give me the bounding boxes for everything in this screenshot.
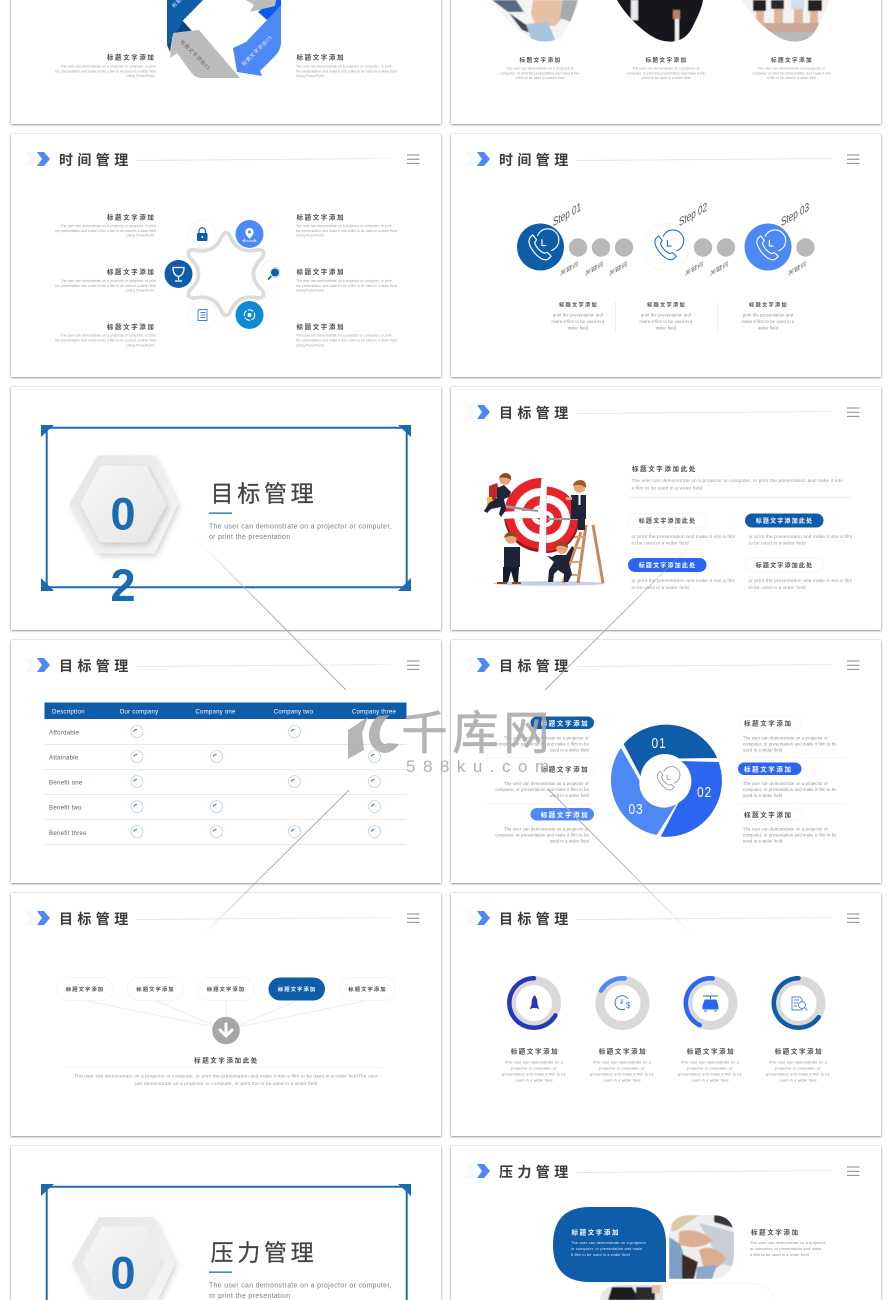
caption 3: computer, or print the presentation and make it into	[752, 71, 831, 75]
header: 目标管理	[499, 658, 573, 674]
text block right: 标题文字添加	[296, 53, 345, 62]
ring 2: money clock	[600, 978, 645, 1026]
section title	[209, 1240, 392, 1300]
step text 2: print the presentation and	[641, 312, 692, 318]
ring text 1: projector or computer, or	[511, 1066, 557, 1070]
ring text 4: used in a wider field	[779, 1079, 817, 1083]
caption 1: The user can demonstrate on a projector or	[506, 67, 574, 71]
panel: comparison table	[11, 640, 441, 883]
right text 3	[296, 322, 397, 347]
ring text 2: used in a wider field	[603, 1079, 641, 1083]
blank outlined card	[669, 1283, 775, 1300]
left item 3: 标题文字添加	[541, 810, 589, 819]
hexagon number badge	[72, 1217, 175, 1300]
photo: team	[600, 1285, 663, 1300]
header	[25, 152, 420, 168]
row labels and rules: Attainable	[49, 754, 79, 762]
donut chart: 02	[697, 784, 712, 800]
photo: meeting	[742, 0, 829, 42]
caption 1	[500, 56, 580, 80]
section title: 压力管理	[210, 1240, 317, 1266]
section title: 目标管理	[210, 480, 317, 506]
ring text 3: presentation and make it film to be	[678, 1073, 742, 1077]
pill row: 标题文字添加	[66, 985, 104, 993]
panel: five pills converge slide	[11, 893, 441, 1136]
option 4: or print the presentation and make it into a film	[748, 578, 852, 583]
right text 3: The user can demonstrate on a projector or computer, or print	[296, 334, 392, 338]
text block right: the presentation and make it into a film to be used in a wider field	[296, 69, 397, 73]
text block right: Using PowerPoint.	[296, 74, 325, 78]
right item 1: computer, or presentation and make it film to be	[743, 742, 837, 746]
row labels and rules: Benefit three	[49, 830, 87, 837]
icon: trophy	[164, 260, 192, 288]
donut chart	[610, 724, 722, 837]
cycle arrows diagram: 标题文字添加03	[240, 34, 274, 67]
right text 3: Using PowerPoint.	[296, 343, 325, 347]
right item 1: The user can demonstrate on a projector or	[743, 736, 829, 740]
step 2: 关键词	[685, 259, 703, 278]
step 1	[517, 200, 633, 278]
blue card: The user can demonstrate on a projector	[571, 1241, 647, 1245]
step 1: 关键词	[585, 259, 603, 278]
step text 1: wider field	[568, 326, 589, 331]
left item 3	[495, 808, 594, 844]
ring text 3: used in a wider field	[691, 1079, 729, 1083]
panel: time management star diagram	[11, 134, 441, 377]
step 1: 关键词	[560, 259, 578, 278]
caption 2: The user can demonstrate on a projector or	[632, 67, 700, 71]
ring 4: document check	[774, 978, 821, 1028]
option 2: 标题文字添加此处	[756, 517, 813, 525]
step text 3: 标题文字添加	[749, 301, 788, 309]
step text 3: wider field	[758, 326, 779, 331]
step 2: Step 02	[679, 200, 707, 230]
table header row: Description	[52, 709, 85, 716]
check marks	[131, 726, 380, 838]
ring 3: helicopter	[686, 978, 733, 1026]
left text 2: 标题文字添加	[107, 267, 156, 276]
left item 3: computer, or presentation and make it film to be	[495, 832, 590, 838]
ring text 1: 标题文字添加	[511, 1046, 559, 1056]
left text 3	[55, 322, 156, 347]
ring text 2: projector or computer, or	[599, 1066, 645, 1070]
header	[465, 1164, 860, 1180]
panel: section cover goal management	[11, 387, 441, 630]
table header row	[44, 702, 406, 719]
connector lines	[85, 1000, 367, 1027]
panel: section cover stress management	[11, 1146, 441, 1300]
hexagon number badge	[72, 458, 175, 611]
left text 1: Using PowerPoint.	[126, 234, 155, 238]
logo mark	[348, 715, 399, 759]
left text 1: 标题文字添加	[107, 212, 156, 221]
caption 2: computer, or print the presentation and make it into	[626, 71, 706, 75]
ring 1: rocket	[509, 978, 556, 1028]
left item 1: used in a wider field	[550, 748, 590, 752]
header: 时间管理	[59, 152, 133, 168]
header: 目标管理	[499, 911, 573, 927]
text block left: the presentation and make it into a film to be used in a wider field	[55, 69, 156, 73]
ring text 1: used in a wider field	[515, 1079, 553, 1083]
step text 2	[640, 301, 693, 331]
icon: lock	[188, 220, 216, 248]
section title	[209, 480, 392, 541]
section title: or print the presentation	[209, 1293, 291, 1300]
header: 压力管理	[499, 1164, 573, 1180]
icon: down arrow	[212, 1017, 240, 1044]
heading block: 标题文字添加此处	[632, 464, 697, 473]
option 2: or print the presentation and make it into a film	[748, 534, 852, 539]
right item 1	[738, 716, 837, 752]
ring text 1	[502, 1046, 566, 1083]
right item 2: The user can demonstrate on a projector or	[743, 781, 829, 786]
ring text 2: 标题文字添加	[599, 1046, 647, 1056]
right item 3: 标题文字添加	[744, 810, 793, 819]
pill row	[57, 978, 396, 1000]
step text 1: 标题文字添加	[559, 301, 598, 309]
right text 2: 标题文字添加	[296, 267, 345, 276]
ring text 3: projector or computer, or	[687, 1066, 733, 1070]
left item 2	[495, 762, 594, 798]
right text 2	[296, 267, 397, 293]
ring text 2: The user can demonstrate on a	[593, 1060, 652, 1064]
photo: hands	[492, 0, 578, 42]
panel: goal management target illustration	[451, 387, 881, 630]
blue frame	[41, 1184, 411, 1300]
header	[465, 658, 860, 674]
caption 1: 标题文字添加	[520, 56, 561, 64]
step 3	[744, 200, 815, 278]
cycle arrows diagram	[167, 0, 281, 78]
option 3	[628, 558, 735, 590]
option 4: 标题文字添加此处	[756, 561, 813, 569]
option 1	[628, 514, 735, 546]
ring text 1: The user can demonstrate on a	[505, 1060, 564, 1064]
text block left: The user can demonstrate on a projector or computer, or print	[60, 64, 156, 68]
right text 2: the presentation and make it into a film to be used in a wider field	[296, 284, 397, 288]
summary text: can demonstrate on a projector or computer, or print the to be used in a wider field	[134, 1081, 318, 1086]
option 1: 标题文字添加此处	[639, 517, 696, 525]
option 4	[746, 558, 852, 590]
donut chart: 03	[629, 801, 643, 817]
side text	[750, 1227, 826, 1257]
row labels and rules: Benefit two	[49, 804, 82, 812]
header	[25, 658, 420, 674]
pill row: 标题文字添加	[136, 985, 175, 993]
header	[465, 152, 860, 168]
left text 1: The user can demonstrate on a projector or computer, or print	[60, 224, 156, 228]
left text 1: the presentation and make it into a film to be used in a wider field	[55, 229, 156, 233]
right item 2: used in a wider field	[743, 793, 783, 798]
caption 2	[626, 56, 706, 80]
panel: time management steps	[451, 134, 881, 377]
ring text 3: 标题文字添加	[687, 1046, 735, 1056]
hexagon number badge: 2	[110, 560, 136, 611]
star ring	[188, 232, 264, 316]
table header row: Company three	[352, 709, 397, 716]
step text 1: make it film to be used in a	[552, 319, 605, 324]
step text 3	[742, 301, 795, 331]
right text 1: 标题文字添加	[296, 212, 345, 221]
left text 3: The user can demonstrate on a projector or computer, or print	[60, 334, 156, 338]
header: 目标管理	[499, 405, 573, 421]
panel: progress rings slide	[451, 893, 881, 1136]
ring text 1: presentation and make it film to be	[502, 1073, 566, 1077]
step text 1	[552, 301, 605, 331]
left item 1: 标题文字添加	[541, 718, 589, 728]
right item 1: used in a wider field	[743, 748, 783, 752]
header: 目标管理	[59, 911, 133, 927]
option 1: or print the presentation and make it into a film	[632, 534, 735, 539]
step text 3: make it film to be used in a	[742, 319, 795, 324]
cycle arrows diagram: 标题文字添加01	[179, 38, 212, 72]
panel: process arrows slide	[11, 0, 441, 124]
right text 3: 标题文字添加	[296, 322, 345, 331]
side text: or computer, or presentation and make	[750, 1247, 822, 1251]
step text 2: wider field	[656, 326, 677, 331]
left item 3: The user can demonstrate on a projector or	[504, 826, 589, 832]
header	[25, 911, 420, 927]
row labels and rules: Benefit one	[49, 780, 83, 786]
ring text 4: presentation and make it film to be	[766, 1073, 830, 1077]
caption 2: 标题文字添加	[646, 56, 687, 64]
right text 3: the presentation and make it into a film to be used in a wider field	[296, 339, 397, 343]
watermark text: 千库网	[402, 707, 554, 759]
pill row: 标题文字添加	[348, 985, 387, 993]
left item 3: used in a wider field	[550, 839, 590, 844]
summary text	[66, 1056, 383, 1086]
table header row: Our company	[120, 709, 159, 716]
section title: The user can demonstrate on a projector or computer,	[209, 1282, 392, 1290]
step 2	[642, 200, 735, 278]
step 3: 关键词	[788, 259, 806, 278]
right text 1	[296, 212, 397, 238]
option 3: or print the presentation and make it into a film	[632, 578, 735, 583]
left item 1: computer, or presentation and make it film to be	[495, 742, 590, 746]
left item 2: computer, or presentation and make it film to be	[495, 787, 590, 792]
icon: magnifier	[260, 260, 288, 288]
side text: it film to be used in a wider field	[750, 1253, 809, 1257]
illustration: team assembling target	[484, 473, 605, 586]
blue card: or computer, or presentation and make	[571, 1247, 643, 1251]
right text 1: the presentation and make it into a film to be used in a wider field	[296, 229, 397, 233]
right item 1: 标题文字添加	[744, 718, 793, 728]
caption 1: computer, or print the presentation and make it into	[500, 71, 580, 75]
left item 1	[495, 716, 594, 752]
step 2: 关键词	[710, 259, 728, 278]
ring text 4: projector or computer, or	[775, 1066, 821, 1070]
caption 3	[752, 56, 831, 80]
text block right: The user can demonstrate on a projector or computer, or print	[296, 64, 392, 68]
blue card: 标题文字添加	[572, 1227, 620, 1236]
left item 2: The user can demonstrate on a projector or	[504, 781, 589, 786]
section title: or print the presentation	[209, 534, 291, 541]
left item 2: 标题文字添加	[541, 764, 589, 773]
table header row: Company two	[274, 709, 314, 716]
donut chart: 01	[652, 735, 666, 751]
side text: The user can demonstrate on a projector	[750, 1241, 826, 1245]
panel: three photo blobs slide	[451, 0, 881, 124]
hexagon number badge: 0	[110, 1248, 136, 1298]
text block left: 标题文字添加	[107, 53, 156, 62]
icon: document	[188, 301, 216, 329]
photo: suit	[617, 0, 703, 42]
ring text 3: The user can demonstrate on a	[681, 1060, 740, 1064]
caption 3: 标题文字添加	[771, 56, 813, 64]
pill row: 标题文字添加	[207, 985, 245, 993]
watermark url: 588ku.com	[406, 757, 557, 776]
left text 1	[55, 212, 156, 238]
pill row: 标题文字添加	[278, 985, 316, 993]
ring text 4	[766, 1046, 830, 1083]
step text 2: make it film to be used in a	[640, 319, 693, 324]
icon: target	[236, 301, 264, 329]
right item 2	[738, 762, 837, 798]
text block left	[55, 53, 156, 78]
option 2	[745, 514, 852, 546]
right item 3: The user can demonstrate on a projector or	[743, 826, 829, 832]
header: 时间管理	[499, 152, 573, 168]
right item 3: used in a wider field	[743, 839, 783, 844]
caption 3: The user can demonstrate on a projector or	[758, 67, 826, 71]
step text 1: print the presentation and	[553, 312, 604, 318]
caption 2: a film to be used in a wider field	[641, 76, 691, 80]
summary text: 标题文字添加此处	[194, 1056, 259, 1064]
left text 2: Using PowerPoint.	[126, 289, 155, 293]
left text 3: 标题文字添加	[107, 322, 156, 331]
option 3: to be used in a wider field	[632, 585, 689, 590]
caption 1: a film to be used in a wider field	[515, 76, 565, 80]
summary text: The user can demonstrate on a projector or computer, or print the presentation and make it into a film to be used in a wider fieldThe user	[74, 1074, 378, 1079]
caption 3: a film to be used in a wider field	[767, 76, 816, 80]
right item 2: computer, or presentation and make it film to be	[743, 787, 837, 792]
ring text 3	[678, 1046, 742, 1083]
right text 2: The user can demonstrate on a projector or computer, or print	[296, 279, 392, 283]
header	[465, 911, 860, 927]
blue frame	[41, 425, 411, 591]
section title: The user can demonstrate on a projector or computer,	[209, 524, 392, 530]
watermark diagonal lines	[197, 540, 694, 935]
left text 2	[55, 267, 156, 293]
step text 2: 标题文字添加	[647, 301, 686, 309]
option 3: 标题文字添加此处	[639, 561, 696, 569]
right item 3: computer, or presentation and make it film to be	[743, 832, 837, 838]
right item 3	[738, 808, 837, 844]
ring text 4: The user can demonstrate on a	[769, 1060, 828, 1064]
left text 2: The user can demonstrate on a projector or computer, or print	[60, 279, 156, 283]
left text 3: the presentation and make it into a film to be used in a wider field	[55, 339, 156, 343]
text block left: Using PowerPoint.	[126, 74, 155, 78]
ring text 2: presentation and make it film to be	[590, 1073, 654, 1077]
header	[465, 405, 860, 421]
ring text 2	[590, 1046, 654, 1083]
icon: location	[236, 220, 264, 248]
row labels and rules	[44, 730, 406, 844]
step 1: Step 01	[553, 200, 581, 230]
watermark: 588ku logo	[348, 707, 554, 759]
step text 3: print the presentation and	[743, 312, 794, 318]
left text 2: the presentation and make it into a film to be used in a wider field	[55, 284, 156, 288]
step 1: 关键词	[609, 259, 627, 278]
step 3: Step 03	[781, 200, 809, 230]
left text 3: Using PowerPoint.	[126, 343, 155, 347]
row labels and rules: Affordable	[49, 730, 79, 736]
ring text 4: 标题文字添加	[775, 1046, 823, 1056]
side text: 标题文字添加	[751, 1227, 800, 1236]
hexagon number badge: 0	[110, 488, 136, 540]
left item 1: The user can demonstrate on a projector or	[504, 736, 589, 740]
blue card: it film to be used in a wider field	[571, 1253, 630, 1257]
photo: typing on laptop	[669, 1215, 734, 1279]
option 2: to be used in a wider field	[748, 540, 806, 546]
table header row: Company one	[195, 709, 236, 716]
heading block	[627, 464, 851, 498]
panel: stress management photo grid	[451, 1146, 881, 1300]
right item 2: 标题文字添加	[744, 764, 793, 773]
option 1: to be used in a wider field	[632, 540, 689, 546]
blue card	[553, 1207, 666, 1282]
header: 目标管理	[59, 658, 133, 674]
right text 2: Using PowerPoint.	[296, 289, 325, 293]
right text 1: The user can demonstrate on a projector or computer, or print	[296, 224, 392, 228]
ring 2: money clock: $	[626, 1001, 631, 1010]
text block right	[296, 53, 397, 78]
heading block: The user can demonstrate on a projector or computer, or print the presentation and make it into	[632, 478, 843, 483]
option 4: to be used in a wider field	[748, 585, 806, 590]
right text 1: Using PowerPoint.	[296, 234, 325, 238]
panel: donut chart slide	[451, 640, 881, 883]
heading block: a film to be used in a wider field	[632, 486, 703, 490]
left item 2: used in a wider field	[550, 793, 590, 798]
